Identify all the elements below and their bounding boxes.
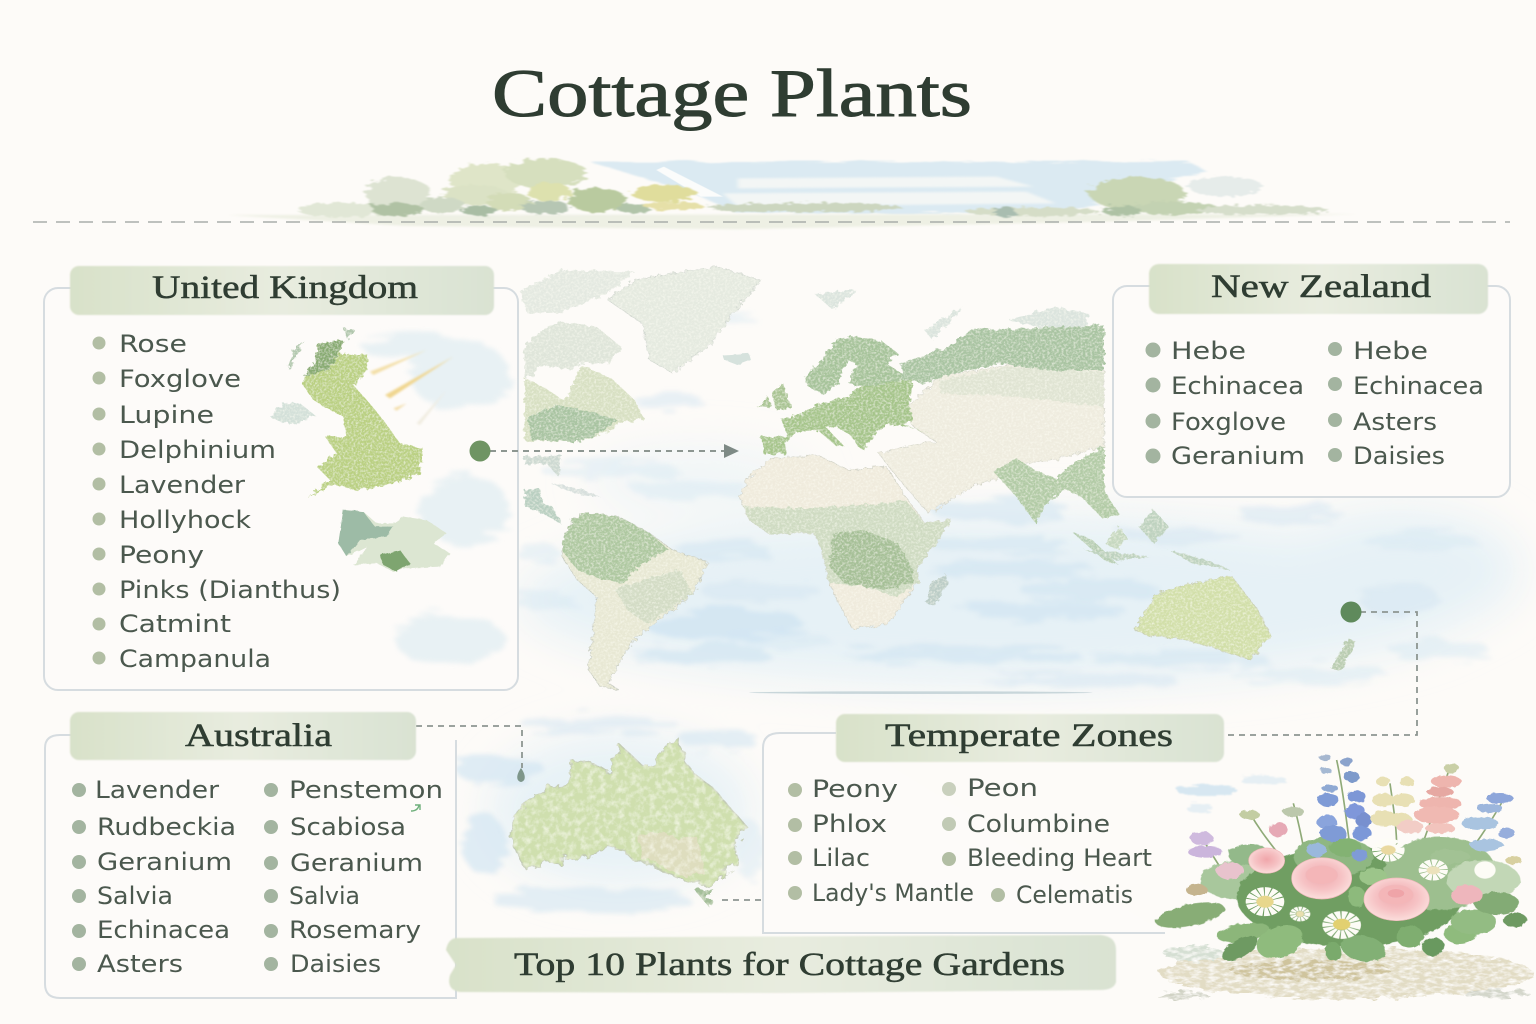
blue delphinium xyxy=(1307,754,1372,861)
panel: australia xyxy=(45,712,456,998)
dashed divider xyxy=(33,221,1510,223)
great britain and ireland xyxy=(270,328,423,498)
landscape illustration xyxy=(227,158,1359,229)
purple and pink left sprigs xyxy=(1186,807,1521,905)
list: united kingdom: Rose xyxy=(119,330,187,358)
panel: new zealand xyxy=(1113,264,1510,497)
list: new zealand xyxy=(1146,337,1484,470)
oceania xyxy=(1085,510,1356,672)
banner: temperate zones: Temperate Zones xyxy=(885,718,1173,754)
bottom banner xyxy=(446,935,1116,993)
banner: australia xyxy=(70,712,416,760)
cream spires xyxy=(1371,777,1415,827)
list: temperate zones: Lady's Mantle xyxy=(812,879,974,907)
list: united kingdom xyxy=(92,330,341,673)
banner: united kingdom xyxy=(70,266,494,315)
right blue spire xyxy=(1462,793,1515,851)
list: australia: Echinacea xyxy=(97,916,230,944)
list: temperate zones: Peon xyxy=(967,774,1038,802)
list: united kingdom: Campanula xyxy=(119,645,271,673)
soft blue wash xyxy=(360,333,510,665)
list: australia: Scabiosa xyxy=(290,813,406,841)
list: new zealand: Hebe xyxy=(1353,337,1428,365)
connector: new zealand to temperate zones xyxy=(1226,602,1417,735)
connector: uk to europe xyxy=(470,440,739,462)
list: australia xyxy=(72,776,443,978)
list: australia: Daisies xyxy=(290,950,381,978)
ocean wash xyxy=(455,309,1520,913)
list: australia: Rudbeckia xyxy=(97,813,236,841)
panel frame xyxy=(44,288,518,690)
roses xyxy=(1249,848,1429,921)
list: australia: Penstemon xyxy=(289,776,443,804)
banner: new zealand xyxy=(1149,264,1488,314)
list: new zealand: Echinacea xyxy=(1171,372,1304,400)
list: temperate zones: Peony xyxy=(812,775,898,803)
list: temperate zones xyxy=(788,774,1152,909)
list: temperate zones: Columbine xyxy=(967,810,1110,838)
map: united kingdom xyxy=(270,328,453,572)
list: australia: Asters xyxy=(97,950,183,978)
list: new zealand: Daisies xyxy=(1353,442,1445,470)
list: united kingdom: Peony xyxy=(119,541,204,569)
list: united kingdom: Delphinium xyxy=(119,436,276,464)
sun rays xyxy=(370,350,453,425)
southern shoreline stroke xyxy=(749,691,1093,694)
list: temperate zones: Bleeding Heart xyxy=(967,844,1152,872)
list: new zealand: Asters xyxy=(1353,408,1437,436)
list: new zealand: Hebe xyxy=(1171,337,1246,365)
list: australia: Salvia xyxy=(97,882,173,910)
banner: australia: Australia xyxy=(185,718,332,754)
lower map fragments xyxy=(338,510,450,572)
banner: united kingdom: United Kingdom xyxy=(152,270,418,306)
world map xyxy=(520,267,1356,694)
list: new zealand: Geranium xyxy=(1171,442,1305,470)
australia landmass xyxy=(512,738,745,906)
list: australia: Lavender xyxy=(95,776,219,804)
stems xyxy=(1203,760,1503,887)
daisies xyxy=(1252,842,1496,935)
banner: new zealand: New Zealand xyxy=(1211,269,1432,305)
list: australia: Salvia xyxy=(289,882,360,910)
banner: temperate zones xyxy=(836,714,1224,762)
australia map xyxy=(512,738,745,906)
north america xyxy=(520,270,644,525)
list: united kingdom: Lupine xyxy=(119,401,214,429)
south america xyxy=(562,513,707,690)
list: temperate zones: Lilac xyxy=(812,844,870,872)
list: united kingdom: Hollyhock xyxy=(119,506,251,534)
list: australia: Geranium xyxy=(97,848,232,876)
list: temperate zones: Celematis xyxy=(1016,881,1133,909)
stone ground xyxy=(1157,945,1533,999)
list: australia: Rosemary xyxy=(289,916,421,944)
list: temperate zones: Phlox xyxy=(812,810,887,838)
list: united kingdom: Catmint xyxy=(119,610,231,638)
blue wash behind flowers xyxy=(1177,775,1287,813)
pink spire xyxy=(1397,763,1462,834)
greenland xyxy=(608,267,760,373)
panel: temperate zones xyxy=(763,714,1224,933)
connector: australia xyxy=(416,726,522,768)
small green arrow xyxy=(411,805,420,811)
panel: united kingdom xyxy=(44,266,518,690)
panel frame xyxy=(763,733,1165,933)
list: united kingdom: Foxglove xyxy=(119,365,241,393)
list: new zealand: Foxglove xyxy=(1171,408,1286,436)
list: united kingdom: Lavender xyxy=(119,471,245,499)
africa xyxy=(739,455,951,628)
map pin xyxy=(517,768,525,782)
list: new zealand: Echinacea xyxy=(1353,372,1484,400)
panel frame xyxy=(45,735,456,998)
list: australia: Geranium xyxy=(290,849,423,877)
connector: tasmania xyxy=(722,899,762,901)
flower illustration xyxy=(1154,754,1533,999)
foliage mass xyxy=(1154,837,1527,966)
eurasia xyxy=(757,290,1127,565)
iceland xyxy=(722,353,751,365)
list: united kingdom: Pinks (Dianthus) xyxy=(119,576,341,604)
title: Cottage Plants xyxy=(492,55,972,131)
bottom banner: Top 10 Plants for Cottage Gardens xyxy=(514,947,1065,983)
panel frame xyxy=(1113,286,1510,497)
